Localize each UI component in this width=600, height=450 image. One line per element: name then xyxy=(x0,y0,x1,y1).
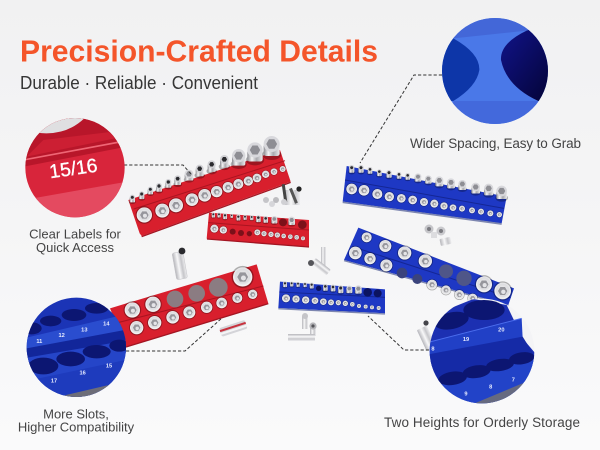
loose sockets by zoom circle four xyxy=(417,320,437,351)
slot numbers: 7 xyxy=(512,378,515,384)
title: Precision-Crafted Details xyxy=(20,34,378,68)
loose socket cluster above small red tray xyxy=(263,184,302,207)
caption: two heights: Two Heights for Orderly Storage xyxy=(384,415,580,430)
loose sockets beside blue trays xyxy=(308,247,331,275)
slot numbers: 8 xyxy=(489,384,492,390)
subtitle: Durable · Reliable · Convenient xyxy=(20,73,258,93)
slot numbers: 14 xyxy=(103,321,110,327)
blue wide tray with sockets xyxy=(344,228,514,306)
slot numbers xyxy=(36,321,112,384)
loose socket cluster above blue wide tray xyxy=(424,224,452,246)
slot numbers: 20 xyxy=(498,328,504,334)
red long tray with sockets xyxy=(128,136,291,237)
lower socket row xyxy=(136,166,286,224)
caption: wider spacing: Wider Spacing, Easy to Grab xyxy=(410,136,581,151)
slot numbers: 19 xyxy=(463,337,469,343)
callout circle: red label detail xyxy=(23,117,127,220)
loose sockets under small blue tray xyxy=(288,313,317,341)
upper upright socket row xyxy=(129,136,281,204)
callout circle: two heights xyxy=(428,299,537,407)
slot numbers: 11 xyxy=(36,339,42,345)
caption: clear labels: Clear Labels for xyxy=(29,226,122,242)
label text 15/16: 15/16 xyxy=(48,156,99,183)
loose socket lying by red tray xyxy=(219,320,248,337)
caption: more slots: Higher Compatibility xyxy=(18,420,135,434)
callout circle: more slots xyxy=(26,298,126,397)
slot numbers: 9 xyxy=(464,391,468,397)
slot numbers: 16 xyxy=(80,370,86,376)
callout circle: wider spacing xyxy=(442,18,548,124)
slot numbers xyxy=(431,328,515,397)
dashed leader lines xyxy=(124,75,442,351)
red small tray with sockets xyxy=(207,213,309,247)
caption: more slots: More Slots, xyxy=(43,406,109,422)
loose long socket, centre-left xyxy=(172,248,188,280)
slot numbers: 13 xyxy=(81,327,87,333)
caption: clear labels: Quick Access xyxy=(36,240,115,255)
slot numbers: 8 xyxy=(431,346,435,352)
blue small tray with sockets xyxy=(278,281,385,314)
slot numbers: 17 xyxy=(51,378,57,384)
slot numbers: 12 xyxy=(59,333,65,339)
slot numbers: 15 xyxy=(106,363,112,369)
blue long tray with sockets xyxy=(343,165,508,224)
red wide tray with sockets xyxy=(110,264,268,347)
